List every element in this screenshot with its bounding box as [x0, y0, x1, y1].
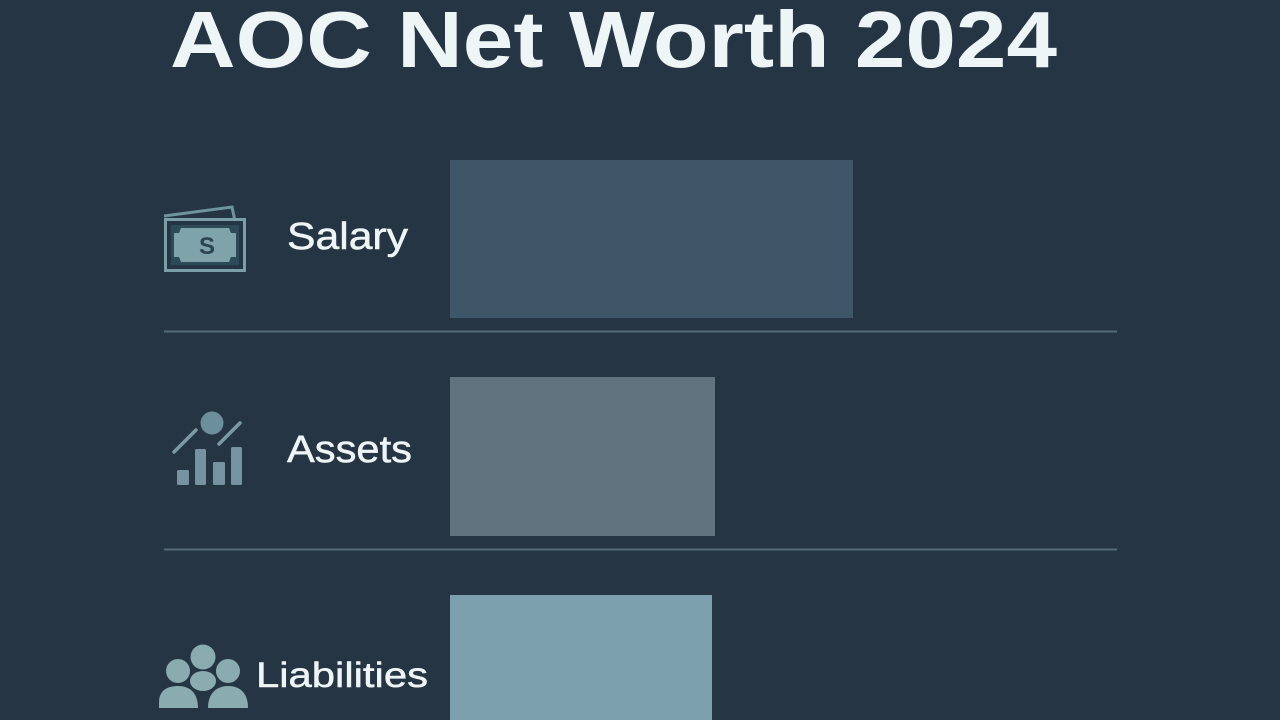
- panel: assets row: [174, 377, 715, 536]
- bar: assets: [450, 377, 715, 536]
- label: liabilities: Liabilities: [256, 656, 428, 695]
- label: assets: Assets: [287, 429, 412, 471]
- panel: salary row: [164, 160, 853, 318]
- bar: salary: [450, 160, 853, 318]
- label: salary: Salary: [287, 216, 408, 258]
- bar: liabilities: [450, 595, 712, 720]
- icon: people group: [159, 644, 248, 708]
- icon: banknotes: [164, 207, 244, 270]
- panel: liabilities row: [159, 595, 712, 720]
- icon: banknotes: S: [199, 233, 215, 260]
- icon: chart with coin: [174, 412, 242, 485]
